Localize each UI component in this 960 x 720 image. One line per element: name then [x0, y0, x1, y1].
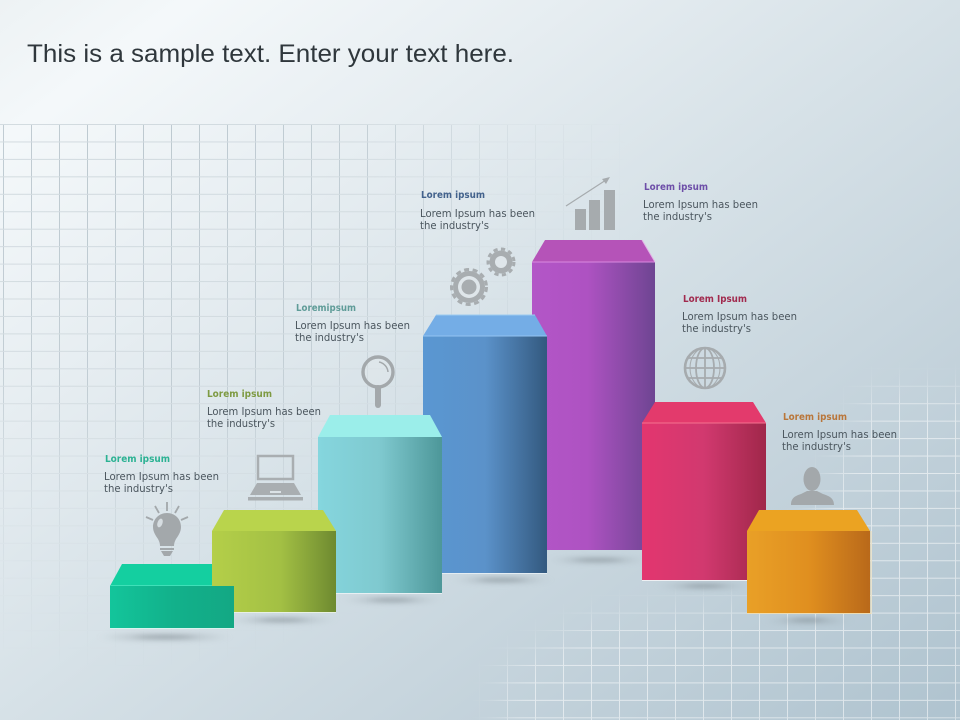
panel: green column	[110, 564, 234, 628]
panel: teal column	[318, 415, 442, 594]
text block: teal	[295, 303, 410, 344]
icon: bar chart with arrow	[566, 177, 615, 230]
text block: olive: Lorem Ipsum has been	[207, 406, 321, 418]
text block: purple: Lorem ipsum	[644, 182, 708, 193]
icon: person	[791, 467, 834, 505]
icon: gears	[452, 249, 514, 304]
text block: olive	[207, 389, 321, 430]
icon: laptop	[248, 456, 303, 500]
icon: globe	[685, 348, 725, 388]
text block: olive: the industry's	[207, 418, 275, 430]
text block: orange: Lorem ipsum	[783, 412, 847, 423]
text block: orange	[782, 412, 897, 453]
text block: olive: Lorem ipsum	[207, 389, 272, 400]
text block: orange: the industry's	[782, 441, 851, 453]
text block: blue: the industry's	[420, 220, 489, 232]
icon: magnifier	[363, 357, 393, 405]
text block: purple: the industry's	[643, 211, 712, 223]
text block: orange: Lorem Ipsum has been	[782, 429, 897, 441]
panel: purple column	[532, 240, 655, 550]
floor shadows	[109, 556, 842, 641]
text block: teal: Loremipsum	[296, 303, 356, 314]
panel: pink column	[642, 402, 766, 580]
text block: green	[104, 454, 219, 495]
text block: green: the industry's	[104, 483, 173, 495]
text block: purple	[643, 182, 758, 223]
text block: blue	[420, 190, 535, 232]
text block: teal: Lorem Ipsum has been	[295, 320, 410, 332]
text block: blue: Lorem Ipsum has been	[420, 208, 535, 220]
text block: pink	[682, 294, 797, 335]
text block: green: Lorem Ipsum has been	[104, 471, 219, 483]
text block: blue: Lorem ipsum	[421, 190, 485, 201]
panel: blue column	[423, 315, 547, 574]
panel: olive column	[212, 510, 336, 612]
text block: pink: Lorem Ipsum	[683, 294, 747, 305]
text block: pink: Lorem Ipsum has been	[682, 311, 797, 323]
icon: light bulb	[146, 502, 188, 556]
text block: teal: the industry's	[295, 332, 364, 344]
panel: orange column	[747, 510, 871, 614]
text block: purple: Lorem Ipsum has been	[643, 199, 758, 211]
text block: pink: the industry's	[682, 323, 751, 335]
text block: green: Lorem ipsum	[105, 454, 170, 465]
title: This is a sample text. Enter your text here.	[27, 40, 514, 68]
